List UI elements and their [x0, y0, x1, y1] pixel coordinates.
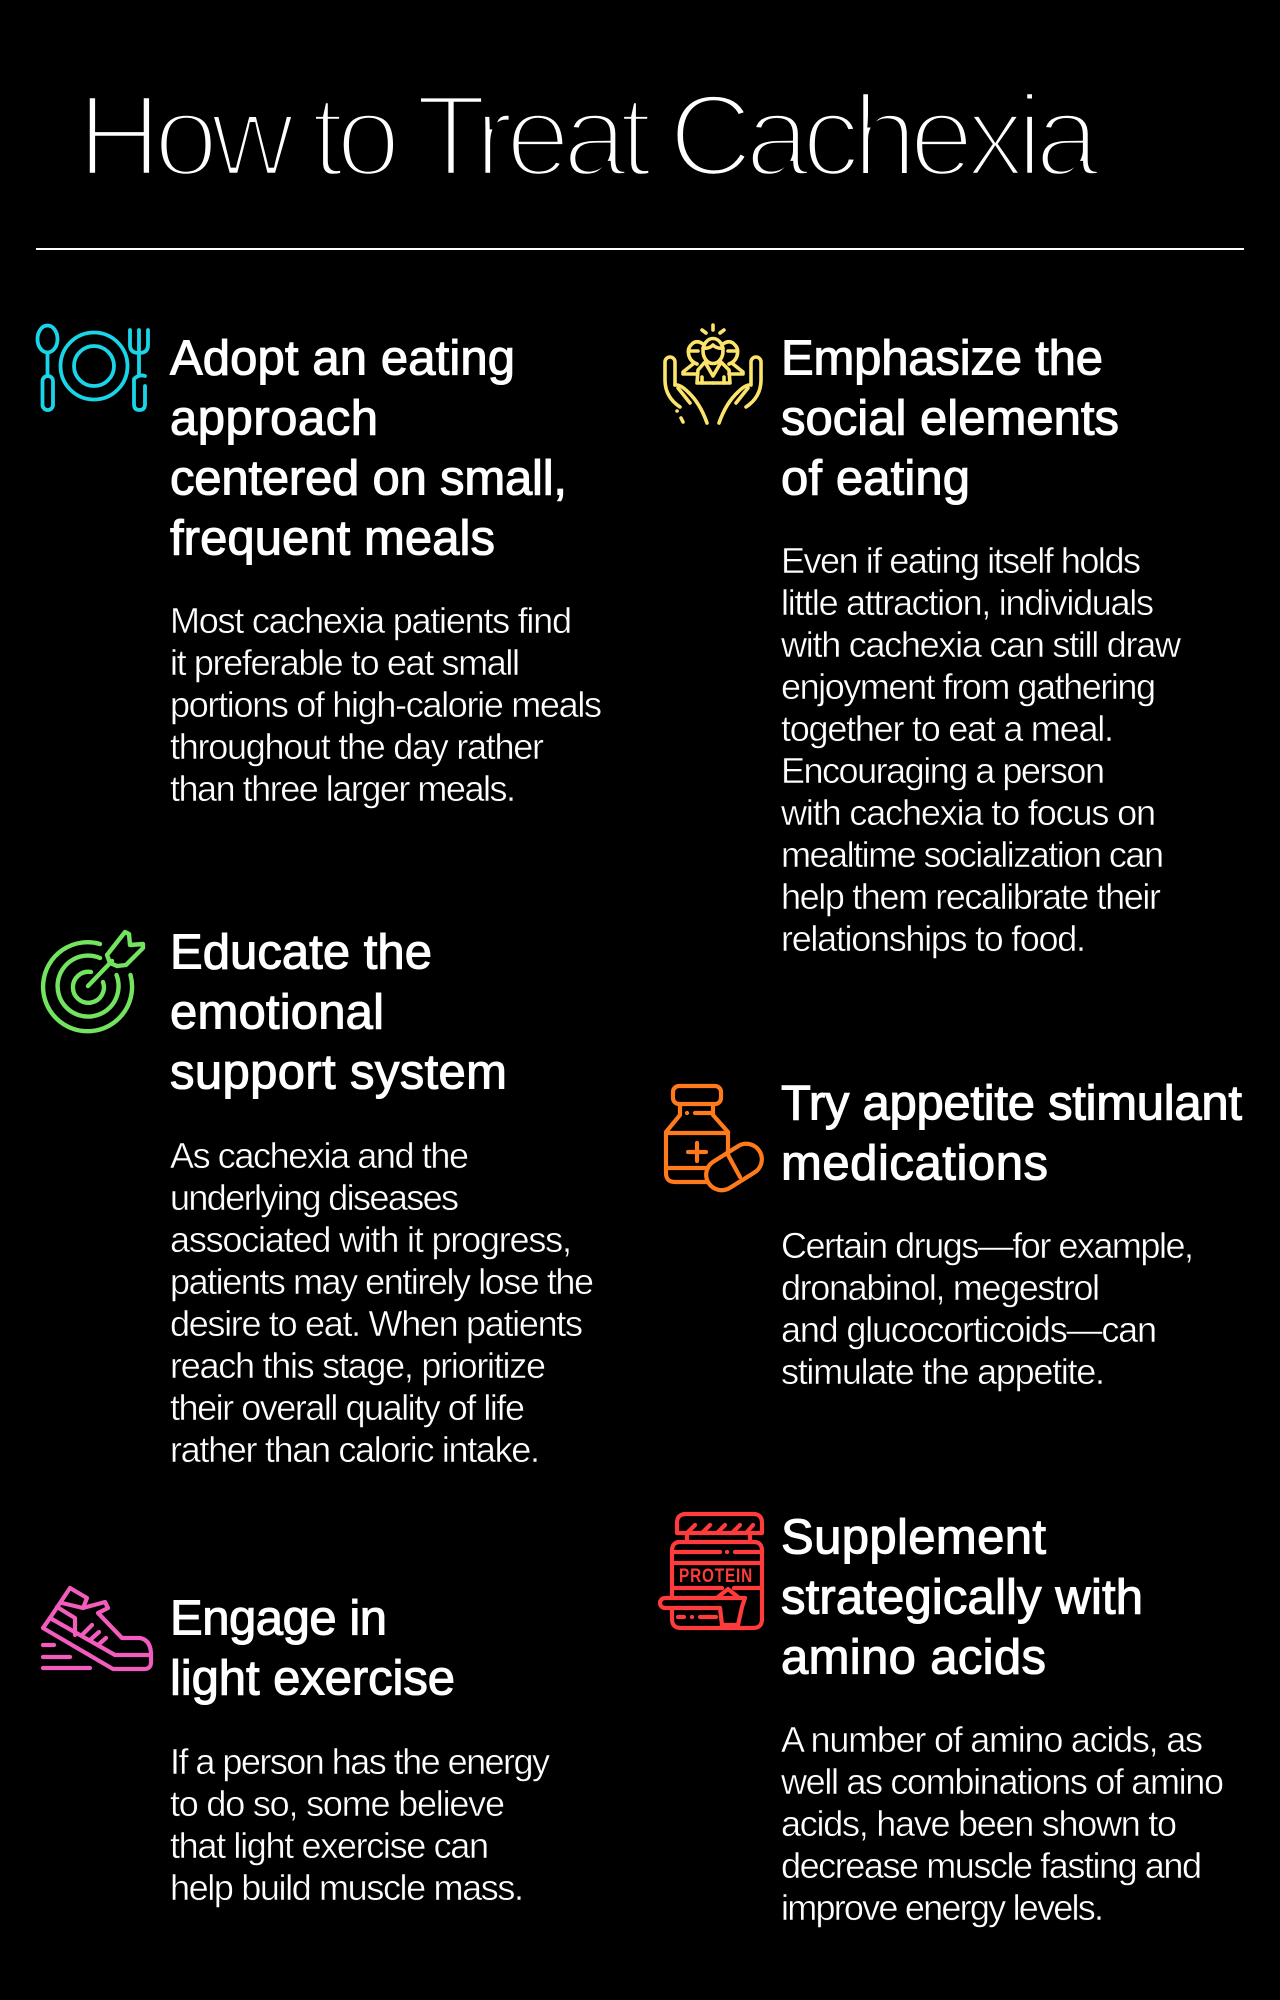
panel: social elements of eating	[665, 325, 1182, 959]
body text: rather than caloric intake.	[170, 1429, 540, 1470]
body text: associated with it progress,	[170, 1219, 572, 1260]
panel: emotional support system	[43, 926, 594, 1470]
body text: and glucocorticoids—can	[781, 1309, 1157, 1350]
heading: support system	[170, 1046, 507, 1100]
icon: hands holding people	[665, 325, 761, 423]
body text: If a person has the energy	[170, 1741, 550, 1782]
body text: improve energy levels.	[781, 1887, 1104, 1928]
body text: decrease muscle fasting and	[781, 1845, 1202, 1886]
body text: reach this stage, prioritize	[170, 1345, 546, 1386]
heading	[170, 1592, 455, 1706]
body text: well as combinations of amino	[780, 1761, 1224, 1802]
body text: dronabinol, megestrol	[781, 1267, 1100, 1308]
body text: patients may entirely lose the	[170, 1261, 594, 1302]
body text: As cachexia and the	[170, 1135, 469, 1176]
heading: centered on small,	[170, 452, 567, 506]
body text: little attraction, individuals	[781, 582, 1154, 623]
panel: light exercise	[43, 1588, 550, 1908]
body text: underlying diseases	[170, 1177, 459, 1218]
heading: approach	[170, 392, 378, 446]
body text	[170, 1135, 594, 1470]
body text: enjoyment from gathering	[781, 666, 1156, 707]
heading: Try appetite stimulant	[781, 1076, 1242, 1130]
body text: acids, have been shown to	[781, 1803, 1177, 1844]
icon label: protein: PROTEIN	[679, 1566, 753, 1587]
body text: Encouraging a person	[781, 750, 1105, 791]
heading: strategically with	[781, 1570, 1143, 1624]
icon: protein jar and scoop	[660, 1514, 762, 1628]
panel: small frequent meals	[38, 326, 602, 809]
body text: to do so, some believe	[170, 1783, 505, 1824]
heading: Educate the	[170, 926, 432, 980]
body text: Certain drugs—for example,	[781, 1225, 1194, 1266]
heading: Adopt an eating	[170, 332, 515, 386]
body text: relationships to food.	[781, 918, 1086, 959]
body text: stimulate the appetite.	[781, 1351, 1105, 1392]
body text: help build muscle mass.	[170, 1867, 524, 1908]
panel: appetite stimulant medications	[666, 1076, 1242, 1392]
body text: together to eat a meal.	[781, 708, 1114, 749]
heading: light exercise	[170, 1652, 455, 1706]
heading: frequent meals	[170, 512, 495, 566]
heading: Engage in	[170, 1592, 387, 1646]
body text	[781, 1225, 1194, 1392]
heading	[781, 1076, 1242, 1190]
heading: amino acids	[781, 1630, 1046, 1684]
body text: mealtime socialization can	[781, 834, 1164, 875]
body text: than three larger meals.	[170, 768, 516, 809]
heading	[170, 332, 567, 566]
body text: A number of amino acids, as	[781, 1719, 1203, 1760]
heading: medications	[781, 1136, 1048, 1190]
body text	[170, 600, 602, 809]
body text: it preferable to eat small	[170, 642, 520, 683]
heading: emotional	[170, 986, 384, 1040]
heading: social elements	[781, 392, 1119, 446]
body text: with cachexia can still draw	[780, 624, 1182, 665]
icon: pill bottle and capsule	[666, 1086, 768, 1196]
body text: desire to eat. When patients	[170, 1303, 583, 1344]
body text: with cachexia to focus on	[780, 792, 1156, 833]
heading: Supplement	[781, 1510, 1046, 1564]
body text: Most cachexia patients find	[170, 600, 572, 641]
body text: their overall quality of life	[170, 1387, 525, 1428]
heading	[781, 332, 1119, 506]
body text: portions of high-calorie meals	[170, 684, 602, 725]
body text: throughout the day rather	[170, 726, 544, 767]
body text	[780, 1719, 1224, 1928]
panel: amino acids	[660, 1510, 1224, 1928]
title: How to Treat Cachexia	[78, 70, 1100, 200]
heading: Emphasize the	[781, 332, 1103, 386]
body text: help them recalibrate their	[781, 876, 1161, 917]
body text	[780, 540, 1182, 959]
body text: that light exercise can	[170, 1825, 489, 1866]
body text	[170, 1741, 550, 1908]
heading	[170, 926, 507, 1100]
icon: target with arrow	[43, 932, 143, 1031]
body text: Even if eating itself holds	[781, 540, 1141, 581]
heading	[781, 1510, 1143, 1684]
heading: of eating	[781, 452, 970, 506]
icon: plate and cutlery	[38, 326, 148, 410]
icon: running shoe	[43, 1588, 151, 1669]
